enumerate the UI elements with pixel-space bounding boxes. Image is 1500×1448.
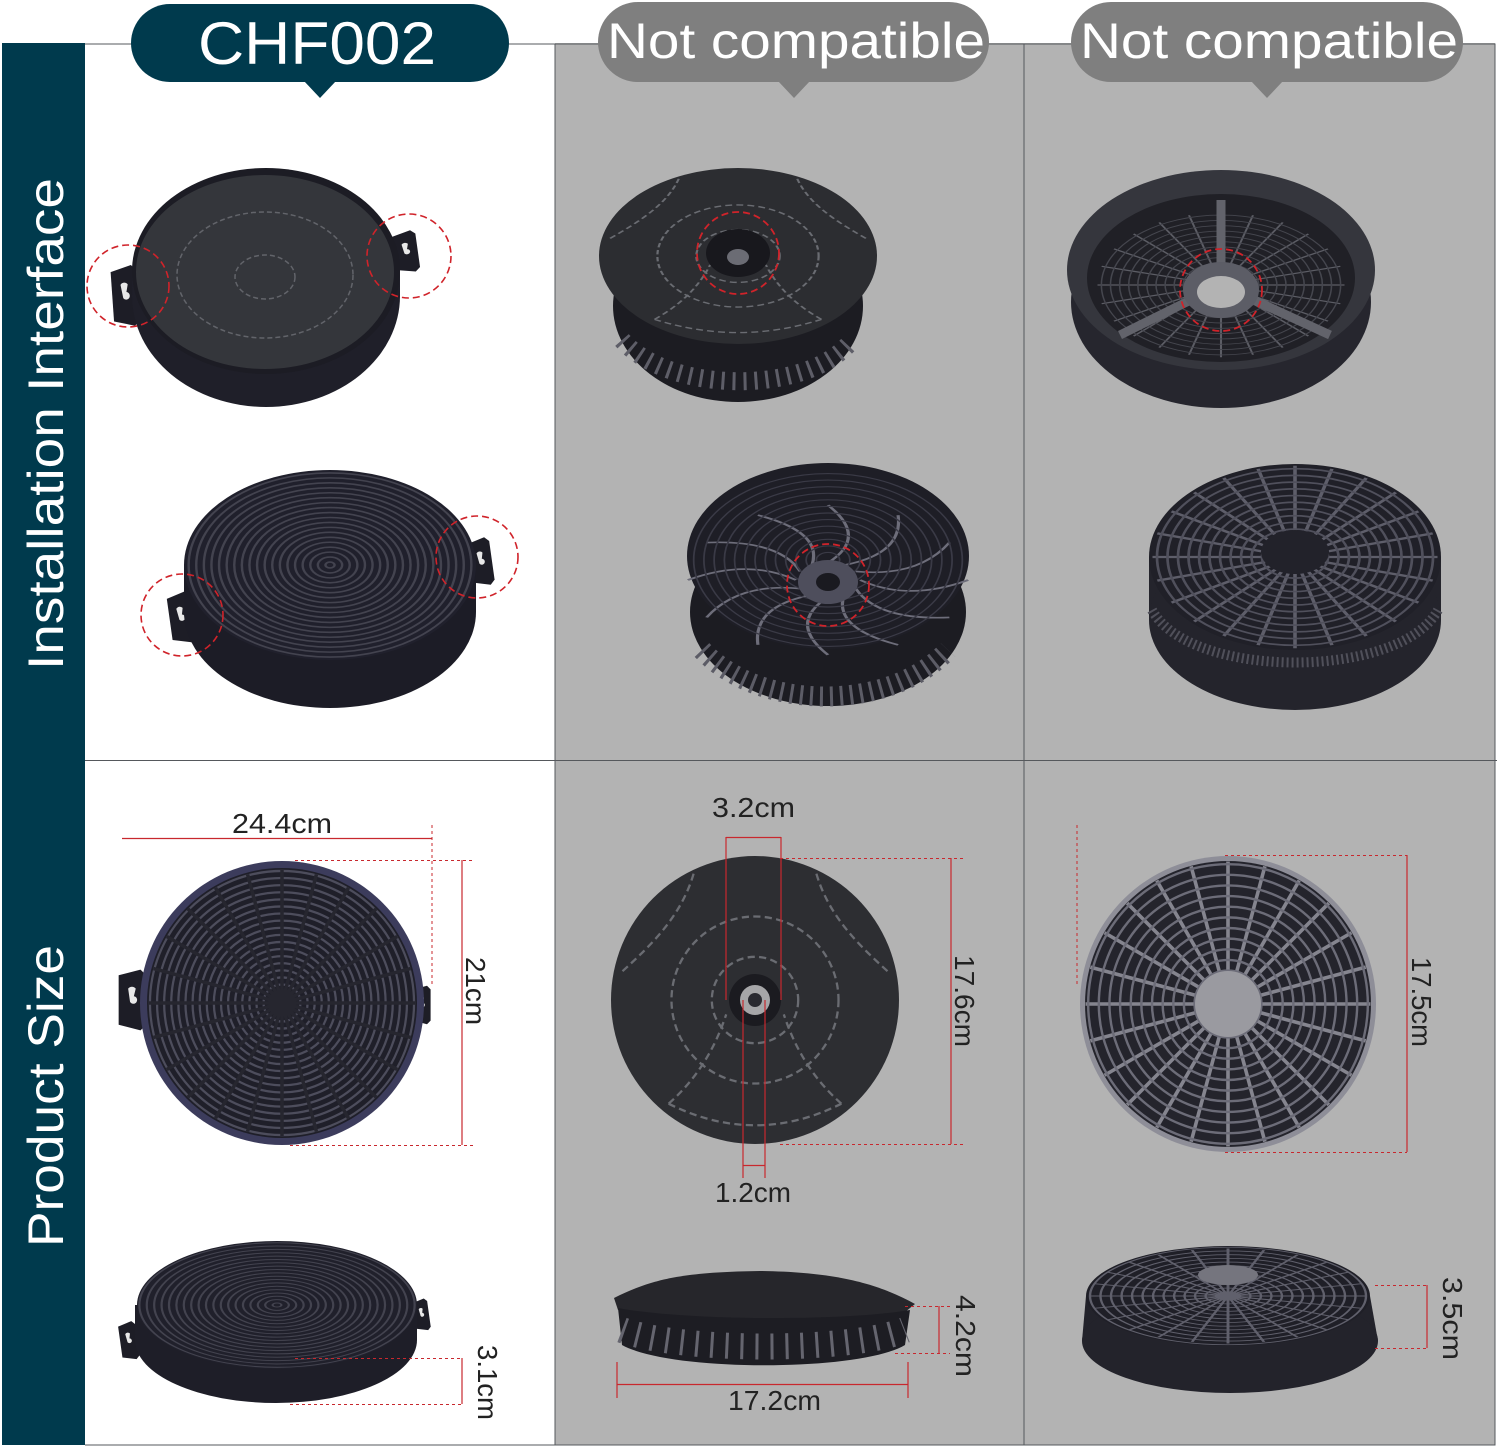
- dimension: 3.2cm hub: [712, 792, 795, 1000]
- icon: dashed callout right: [367, 214, 451, 298]
- heading: installation interface: Installation Interface: [18, 178, 74, 670]
- dimension: 17.5cm diameter: [1077, 825, 1437, 1152]
- dimension: 17.2cm width: [617, 1362, 908, 1416]
- dimension: 17.6cm diameter: 17.6cm: [949, 955, 980, 1047]
- heading pill: CHF002: CHF002: [198, 10, 436, 77]
- heading pill: CHF002: [131, 4, 509, 98]
- icon: dashed callout left: [141, 574, 223, 656]
- heading pill: not compatible 1: Not compatible: [607, 13, 985, 69]
- icon: dashed callout left: [87, 245, 169, 327]
- dimension: 3.1cm thickness: 3.1cm: [472, 1345, 503, 1420]
- heading pill: not compatible 2: Not compatible: [1080, 13, 1458, 69]
- dimension: 3.5cm height: 3.5cm: [1437, 1277, 1468, 1360]
- product: incompatible grid side view with dimension: [1082, 1246, 1468, 1393]
- panel: not compatible column 2 background: [1024, 43, 1495, 1445]
- product: CHF002 front view with dimensions: [119, 808, 491, 1146]
- icon: dashed callout right: [436, 516, 518, 598]
- heading: product size: Product Size: [18, 945, 74, 1247]
- dimension: 4.2cm height: 4.2cm: [950, 1295, 981, 1377]
- dimension: 21cm height: 21cm: [460, 957, 491, 1025]
- dimension: 17.5cm diameter: 17.5cm: [1406, 957, 1437, 1047]
- dimension: 1.2cm hole: [715, 1000, 791, 1208]
- dimension: 3.1cm thickness: [290, 1345, 503, 1420]
- heading pill: not compatible 2: [1071, 2, 1463, 98]
- dimension: 4.2cm height: [895, 1295, 981, 1377]
- dimension: 24.4cm width: 24.4cm: [232, 808, 332, 839]
- product: incompatible square grid filter: [1149, 464, 1441, 710]
- product: CHF002 side view with dimension: [118, 1241, 503, 1420]
- product: CHF002 felt side with tabs: [87, 168, 451, 407]
- icon: dashed callout centre: [787, 544, 869, 626]
- icon: dashed callout centre: [1180, 249, 1262, 331]
- panel: not compatible column 1 background: [555, 43, 1024, 1445]
- dimension: 3.5cm height: [1375, 1277, 1468, 1360]
- product: incompatible felt side view with dimensions: [614, 1271, 981, 1416]
- dimension: 1.2cm hole: 1.2cm: [715, 1177, 791, 1208]
- panel: left row label band: [2, 43, 85, 1445]
- product: CHF002 spiral side with tabs: [141, 470, 518, 708]
- icon: dashed callout centre: [697, 212, 779, 294]
- heading pill: not compatible 1: [598, 2, 989, 98]
- product: incompatible wave grid filter: [687, 463, 969, 706]
- product: incompatible felt with centre hub: [599, 168, 877, 402]
- product: incompatible felt front view with dimensions: [611, 792, 980, 1208]
- dimension: 3.2cm hub: 3.2cm: [712, 792, 795, 823]
- product: incompatible grid front view with dimension: [1077, 825, 1437, 1152]
- dimension: 17.6cm diameter: [780, 858, 980, 1144]
- product: incompatible bowl with three-arm frame: [1067, 170, 1375, 408]
- dimension: 17.2cm width: 17.2cm: [728, 1385, 821, 1416]
- dimension: 21cm height: [290, 860, 491, 1146]
